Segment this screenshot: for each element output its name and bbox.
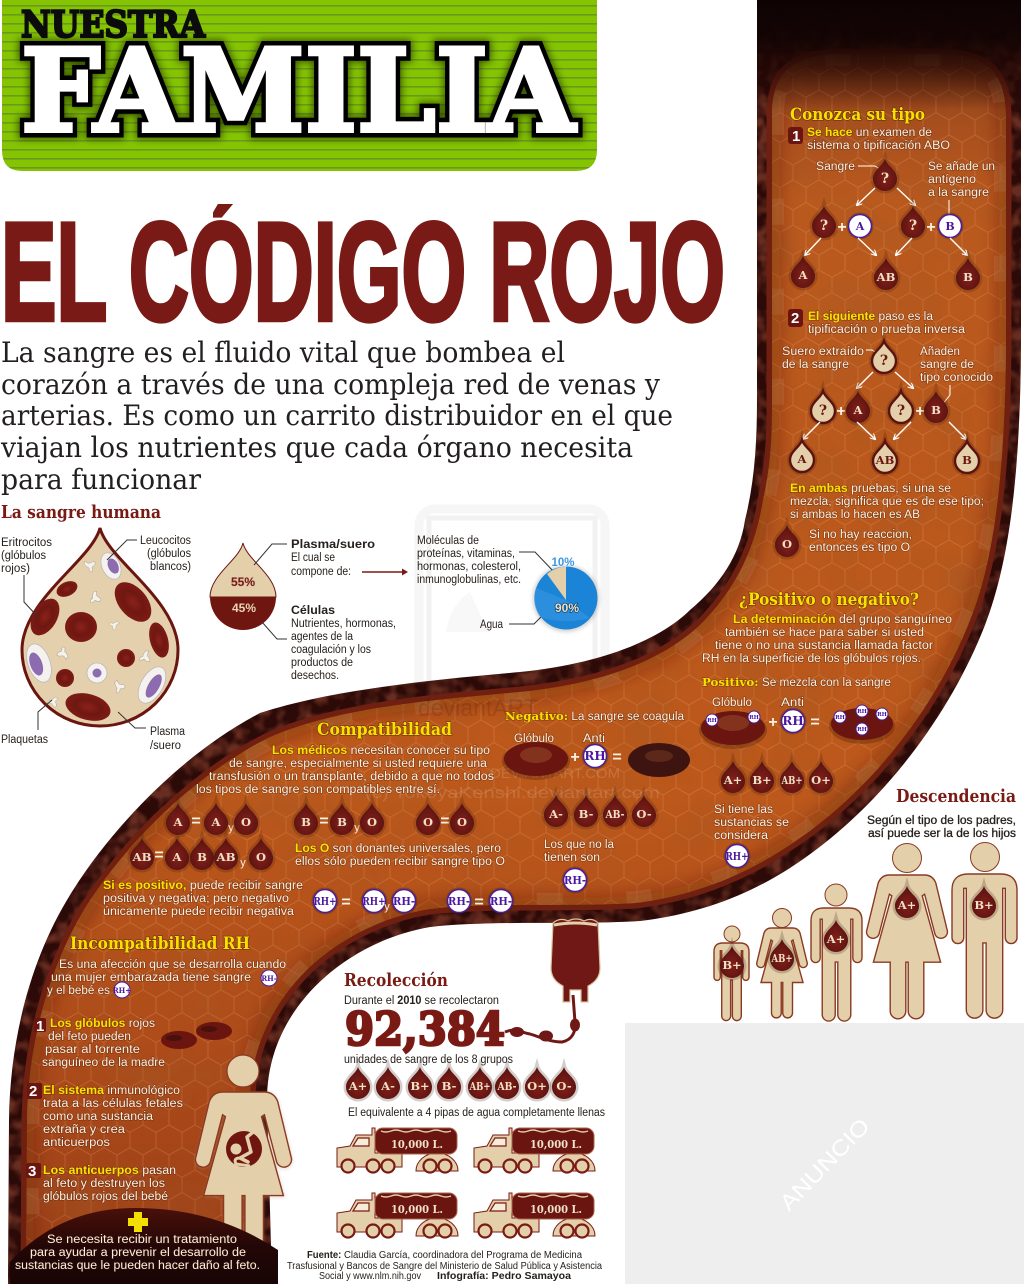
positive groups [714, 761, 833, 870]
negative groups: B- [579, 807, 594, 821]
small drop: plasma and cells percentages: 55% [231, 575, 255, 589]
RH compatibility equations [312, 888, 514, 914]
negative test: = [612, 749, 622, 766]
negative groups: Los que no la [544, 839, 615, 851]
intro paragraph: viajan los nutrientes que cada órgano necesita [0, 431, 633, 464]
positive test: RH [877, 712, 887, 718]
paragraph: Los médicos necesitan conocer su tipo [272, 745, 490, 757]
labels: cell types: Leucocitos [140, 535, 191, 547]
blood compatibility equations: y [228, 822, 234, 834]
step 1: 1 [36, 1018, 44, 1035]
text: universal donors [295, 843, 505, 868]
labels: cell types: Plaquetas [1, 734, 48, 746]
negative test: RH [584, 749, 606, 763]
paragraph: los tipos de sangre son compatibles entre sí. [196, 784, 440, 796]
diagram: reverse typing: ? [880, 353, 888, 369]
step 2 text: El siguiente paso es la [808, 311, 934, 323]
step 1: Los glóbulos rojos [50, 1018, 155, 1030]
panel: ad placeholder [625, 1023, 1024, 1284]
step 2: 2 [29, 1083, 37, 1100]
paragraph: también se hace para saber si usted [725, 627, 924, 639]
step 1: sanguíneo de la madre [42, 1057, 165, 1069]
RH compatibility equations: = [474, 894, 484, 911]
treatment note [15, 1234, 260, 1272]
text: plasma and cells: El cual se [291, 552, 335, 564]
heading: La sangre humana [1, 502, 161, 523]
positive groups: A+ [723, 773, 742, 787]
diagram: reverse typing: B [931, 403, 941, 417]
positive test: Positivo: Se mezcla con la sangre [702, 675, 891, 689]
blood compatibility equations: O [457, 815, 467, 829]
diagram: ABO typing: Sangre [816, 161, 855, 173]
diagram: reverse typing: A [853, 403, 864, 417]
panel: compatibilidad [103, 720, 514, 918]
figure: girl [757, 908, 807, 1018]
watermark: deviantart logo outline [419, 509, 605, 749]
step 2: El sistema inmunológico [43, 1085, 180, 1097]
diagram: reverse typing: sangre de [920, 359, 974, 371]
diagram: ABO typing: B [963, 270, 973, 284]
positive test: RH [749, 715, 759, 721]
tanker truck 2 [474, 1128, 595, 1172]
tanker truck 4 [474, 1193, 595, 1238]
diagram: ABO typing: B [945, 220, 955, 233]
labels: cell types: /suero [150, 740, 181, 752]
diagram: reverse typing [782, 341, 993, 473]
diagram: ABO typing: A [855, 220, 865, 233]
text: molecules: proteínas, vitaminas, [417, 548, 515, 560]
eight blood type drops: O+ [527, 1079, 547, 1093]
figure: father [952, 842, 1017, 1018]
diagram: reverse typing: de la sangre [782, 359, 849, 371]
blood compatibility equations: = [154, 847, 164, 864]
intro paragraph: corazón a través de una compleja red de venas y [1, 368, 660, 401]
positive groups: AB+ [781, 773, 802, 787]
step 1 badge: 1 [792, 128, 800, 145]
negative groups: AB- [605, 807, 625, 821]
blood compatibility equations: O [241, 815, 251, 829]
labels: cell types: blancos) [150, 561, 191, 573]
text: en ambas [790, 483, 984, 521]
positive groups: B+ [752, 773, 772, 787]
negative test: Anti [583, 733, 605, 745]
step 2: extraña y crea [43, 1124, 126, 1136]
blood compatibility equations: = [440, 813, 450, 830]
blood compatibility equations: B [301, 815, 311, 829]
treatment note: sustancias que le pueden hacer daño al feto. [15, 1260, 260, 1272]
positive test: RH [857, 727, 867, 733]
labels: cell types: Plasma [150, 726, 186, 738]
drop: type O note: O [782, 537, 792, 551]
text: plasma and cells: Plasma/suero [291, 539, 375, 551]
eight blood type drops: AB- [497, 1079, 517, 1093]
RH compatibility equations: = [341, 894, 351, 911]
text: molecules: inmunoglobulinas, etc. [417, 574, 521, 586]
text: molecules: Moléculas de [417, 535, 479, 547]
diagram: reverse typing: B [962, 453, 972, 467]
diagram: reverse typing: ? [819, 403, 827, 419]
RH compatibility equations: RH+ [314, 895, 336, 908]
step 1: pasar al torrente [45, 1044, 140, 1056]
text: molecules: hormonas, colesterol, [417, 561, 521, 573]
pie chart: 90% water 10% molecules: 10% [551, 557, 575, 569]
pie chart: 90% water 10% molecules: 90% [555, 601, 579, 615]
paragraph [702, 614, 952, 665]
text: molecules: Agua [480, 619, 504, 631]
text: universal donors: ellos sólo pueden recibir sangre tipo O [295, 856, 505, 868]
positive groups: sustancias se [714, 817, 789, 829]
step 3: al feto y destruyen los [43, 1178, 165, 1190]
drop: type O note [775, 525, 912, 557]
heading: Recolección [344, 970, 448, 991]
diagram: reverse typing: A [797, 452, 808, 466]
label: familia shadow: FAMILIA [21, 24, 577, 158]
arrow: plasma to components [362, 568, 408, 576]
text: en ambas: si ambas lo hacen es AB [790, 509, 920, 521]
blood compatibility equations: O [256, 850, 266, 864]
blood compatibility equations: y [354, 822, 360, 834]
paragraph: La determinación del grupo sanguíneo [733, 614, 952, 626]
intro paragraph: La sangre es el fluido vital que bombea el [1, 336, 565, 369]
source credits: Trasfusional y Bancos de Sangre del Ministerio de Salud Pública y Asistencia [287, 1261, 602, 1272]
step 2 [27, 1083, 183, 1149]
text: if positive: Si es positivo, puede recibir sangre [103, 880, 303, 892]
negative groups [544, 795, 656, 894]
tanker truck 4: 10,000 L. [530, 1203, 582, 1216]
heading: Incompatibilidad RH [70, 934, 250, 954]
step 1 [34, 1018, 165, 1069]
blood compatibility equations: O [423, 815, 433, 829]
text: equivalent: El equivalente a 4 pipas de agua completamente llenas [348, 1107, 605, 1119]
text: plasma and cells: Nutrientes, hormonas, [291, 618, 396, 630]
label: familia: FAMILIA [21, 24, 577, 158]
watermark: deviantart text over ribbon: DEVIANTART.COM [490, 765, 620, 781]
step 3: 3 [28, 1163, 36, 1180]
text: plasma and cells: coagulación y los [291, 644, 371, 656]
tanker truck 1: 10,000 L. [391, 1138, 443, 1151]
paragraph: una mujer embarazada tiene sangre [51, 972, 251, 984]
labels: cell types: Eritrocitos [1, 537, 52, 549]
paragraph: Es una afección que se desarrolla cuando [59, 959, 286, 971]
tanker truck 2: 10,000 L. [530, 1138, 582, 1151]
tanker truck 1 [337, 1128, 458, 1172]
diagram: ABO typing: A [798, 268, 809, 282]
source credits: Infografía: Pedro Samayoa [437, 1271, 571, 1282]
pregnant woman figure [195, 1055, 292, 1264]
figure: older boy: A+ [826, 932, 845, 946]
positive groups: O+ [811, 773, 831, 787]
paragraph: RH en la superficie de los glóbulos rojos. [702, 653, 921, 665]
diagram: ABO typing: Se añade un [928, 161, 995, 173]
diagram: ABO typing: antígeno [928, 174, 976, 186]
step 2 text [808, 311, 966, 336]
text: plasma and cells: productos de [291, 657, 353, 669]
paragraph [47, 959, 286, 998]
negative test: Glóbulo [514, 733, 554, 745]
icon: yellow plus [128, 1212, 148, 1232]
positive test: Anti [781, 697, 804, 709]
negative groups: O- [636, 807, 652, 821]
blood compatibility equations: A [172, 850, 183, 864]
caption: Según el tipo de los padres, [867, 815, 1016, 827]
figure: mother [867, 844, 947, 1019]
label: nuestra: NUESTRA [21, 4, 206, 46]
text: plasma and cells: compone de: [291, 566, 351, 578]
step 1 badge [788, 127, 803, 145]
intro paragraph: arterias. Es como un carrito distribuidor en el que [1, 399, 673, 432]
caption [867, 815, 1016, 840]
figure: girl: AB+ [771, 951, 792, 965]
blood compatibility equations: B [197, 850, 207, 864]
diagram: ABO typing: + [837, 219, 847, 236]
negative test: Negativo: La sangre se coagula [505, 709, 685, 723]
text: if positive: positiva y negativa; pero negativo [103, 893, 289, 905]
blood compatibility equations: = [319, 813, 329, 830]
diagram: reverse typing: ? [897, 403, 905, 419]
treatment note: Se necesita recibir un tratamiento [47, 1234, 237, 1246]
text: plasma and cells: desechos. [291, 670, 339, 682]
figure: older boy [811, 884, 862, 1021]
source credits: Social y www.nlm.nih.gov [319, 1271, 421, 1282]
step 2: como una sustancia [43, 1111, 154, 1123]
text: plasma and cells [254, 539, 396, 682]
text: en ambas: mezcla, significa que es de ese tipo; [790, 496, 984, 508]
panel: descendencia [714, 786, 1017, 1021]
text: 2010: Durante el 2010 se recolectaron [344, 995, 499, 1007]
blood compatibility equations: y [240, 857, 246, 869]
watermark: deviantart text over ribbon [365, 695, 660, 802]
heading: ¿Positivo o negativo? [739, 590, 919, 610]
positive test: RH [707, 718, 717, 724]
blood compatibility equations: B [337, 815, 347, 829]
paragraph: RH- [261, 974, 277, 983]
step 3 [26, 1163, 176, 1203]
panel: conozca su tipo [775, 105, 995, 557]
positive test: = [810, 714, 820, 731]
small drop: plasma and cells percentages [210, 543, 276, 630]
panel: la sangre humana [1, 502, 599, 752]
labels: cell types: (glóbulos [147, 548, 191, 560]
diagram: ABO typing: + [926, 219, 936, 236]
step 1 text: Se hace un examen de [807, 127, 932, 139]
positive groups: considera [714, 830, 769, 842]
positive groups: RH+ [726, 850, 748, 863]
positive test: RH [782, 714, 804, 728]
positive test [699, 675, 895, 749]
source credits [287, 1250, 602, 1282]
eight blood type drops: A- [380, 1079, 395, 1093]
text: if positive [103, 880, 303, 918]
blood compatibility equations: O [367, 815, 377, 829]
step 3: Los anticuerpos pasan [43, 1165, 176, 1177]
eight blood type drops: AB+ [469, 1079, 490, 1093]
text: en ambas: En ambas pruebas, si una se [790, 483, 951, 495]
diagram: ABO typing [791, 159, 995, 290]
negative groups: tienen son [544, 852, 600, 864]
positive test: + [768, 714, 778, 731]
treatment note: para ayudar a prevenir el desarrollo de [30, 1247, 246, 1259]
step 2: trata a las células fetales [43, 1098, 183, 1110]
positive groups: Si tiene las [714, 804, 773, 816]
negative groups: A- [548, 807, 563, 821]
RH compatibility equations: RH- [490, 895, 512, 908]
blood compatibility equations [130, 803, 474, 870]
heading: Conozca su tipo [790, 105, 925, 125]
labels: cell types: (glóbulos [1, 550, 46, 562]
figure: mother: A+ [897, 898, 916, 912]
text: plasma and cells: agentes de la [291, 631, 354, 643]
source credits: Fuente: Claudia García, coordinadora del Programa de Medicina [307, 1250, 582, 1261]
blood compatibility equations: A [173, 815, 184, 829]
diagram: ABO typing: ? [881, 171, 889, 187]
eight blood type drops [346, 1067, 576, 1099]
diagram: ABO typing: a la sangre [928, 187, 989, 199]
eight blood type drops: B+ [410, 1079, 430, 1093]
ad label: ANUNCIO [775, 1113, 875, 1215]
figure: small boy: B+ [722, 958, 742, 972]
step 2: anticuerpos [43, 1137, 110, 1149]
label: familia: FAMILIA [21, 24, 577, 158]
positive test: Glóbulo [712, 697, 752, 709]
panel: positivo o negativo [502, 590, 952, 894]
positive test: RH [857, 709, 867, 715]
paragraph: y el bebé es [47, 985, 110, 997]
step 2 text: tipificación o prueba inversa [808, 324, 966, 336]
big number: 92,384 [345, 1002, 505, 1056]
eight blood type drops: B- [442, 1079, 457, 1093]
blood bag with tube [505, 919, 600, 1042]
text: universal donors: Los O son donantes universales, pero [295, 843, 501, 855]
drop: type O note: entonces es tipo O [809, 542, 910, 554]
text: molecules [417, 535, 555, 631]
negative test: + [570, 749, 580, 766]
step 2 badge: 2 [791, 310, 799, 327]
negative test [502, 709, 690, 780]
RH compatibility equations: RH- [448, 895, 470, 908]
text: plasma and cells: Células [291, 605, 335, 617]
drop: type O note: Si no hay reaccion, [809, 529, 912, 541]
blood compatibility equations: A [211, 815, 222, 829]
labels: cell types [1, 535, 191, 752]
eight blood type drops: O- [556, 1079, 572, 1093]
tanker truck 3: 10,000 L. [391, 1203, 443, 1216]
small drop: plasma and cells percentages: 45% [232, 601, 256, 615]
caption: así puede ser la de los hijos [868, 828, 1016, 840]
pie chart: 90% water 10% molecules [533, 557, 599, 632]
heading: Compatibilidad [317, 720, 452, 740]
step 1: del feto pueden [48, 1031, 131, 1043]
paragraph: transfusión o un transplante, debido a que no todos [209, 771, 494, 783]
diagram: reverse typing: AB [875, 453, 895, 467]
intro paragraph [0, 336, 673, 496]
panel: incompatibilidad RH [10, 934, 292, 1284]
watermark: deviantart text over ribbon: (c) TokoyaKenshi.deviantart.com [365, 785, 660, 802]
red cells [161, 1022, 232, 1049]
step 2 badge [788, 309, 803, 327]
RH compatibility equations: RH+ [362, 895, 386, 908]
RH compatibility equations: y [384, 901, 390, 913]
tanker truck 3 [337, 1193, 458, 1238]
dark bottom arc [10, 1208, 278, 1284]
text: units: unidades de sangre de los 8 grupos [344, 1054, 513, 1066]
diagram: reverse typing: Suero extraído [782, 346, 864, 358]
positive test: RH [835, 715, 845, 721]
paragraph: de sangre, especialmente si usted requiere una [229, 758, 488, 770]
text: if positive: únicamente puede recibir negativa [103, 906, 295, 918]
large blood drop with cells [22, 528, 178, 726]
blood compatibility equations: AB [131, 850, 152, 864]
diagram: reverse typing: + [915, 403, 925, 420]
RH compatibility equations: RH- [393, 895, 415, 908]
diagram: reverse typing: tipo conocido [920, 372, 993, 384]
paragraph: tiene o no una sustancia llamada factor [715, 640, 933, 652]
diagram: ABO typing: AB [876, 270, 896, 284]
step 1 text: sistema o tipificación ABO [807, 140, 950, 152]
panel: nuestra familia header [2, 0, 597, 171]
blood compatibility equations: = [191, 813, 201, 830]
diagram: reverse typing: Añaden [920, 346, 960, 358]
labels: cell types: rojos) [1, 563, 30, 575]
eight blood type drops: A+ [348, 1079, 367, 1093]
intro paragraph: para funcionar [1, 463, 202, 496]
watermark: deviantart text over ribbon: deviantART [418, 695, 538, 722]
paragraph [196, 745, 494, 796]
diagram: reverse typing: + [836, 403, 846, 420]
step 3: glóbulos rojos del bebé [43, 1191, 168, 1203]
figure: father: B+ [974, 898, 994, 912]
step 1 text [807, 127, 950, 152]
diagram: ABO typing: ? [820, 218, 828, 234]
panel: recoleccion [287, 919, 605, 1282]
blood compatibility equations: AB [215, 850, 236, 864]
negative groups: RH- [564, 874, 586, 887]
paragraph: RH+ [113, 986, 131, 995]
figure: small boy [714, 926, 749, 1021]
diagram: ABO typing: ? [909, 218, 917, 234]
